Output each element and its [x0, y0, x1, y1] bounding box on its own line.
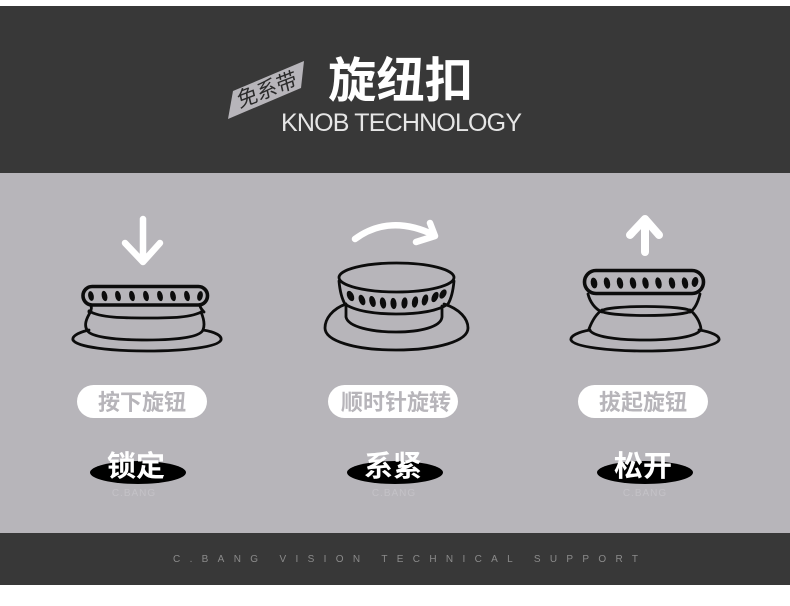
watermark: C.BANG — [623, 488, 667, 499]
illustration: knob rotated — [325, 263, 468, 350]
badge: no strap needed: 免系带 — [235, 67, 299, 113]
pill label: press knob — [77, 385, 207, 418]
illustration: knob pulled up — [571, 270, 719, 351]
subtitle: KNOB TECHNOLOGY — [281, 109, 522, 137]
step 2: rotate clockwise — [325, 223, 468, 499]
footer text: C.BANG VISION TECHNICAL SUPPORT — [173, 554, 638, 565]
pill label: pull knob: 拔起旋钮 — [599, 390, 687, 415]
step 3: pull up — [571, 219, 719, 499]
result badge: locked — [90, 450, 186, 484]
step 1: press down — [73, 219, 221, 499]
icon: up arrow — [630, 219, 659, 252]
panel: header band — [0, 6, 790, 173]
panel: footer band — [0, 533, 790, 585]
title: 旋纽扣 — [328, 55, 473, 108]
result badge: locked: 锁定 — [107, 450, 165, 483]
icon: down arrow — [125, 219, 160, 262]
panel: main grey area — [0, 173, 790, 533]
watermark: C.BANG — [372, 488, 416, 499]
pill label: pull knob — [578, 385, 708, 418]
pill label: rotate clockwise: 顺时针旋转 — [341, 390, 451, 415]
pill label: rotate clockwise — [328, 385, 458, 418]
illustration: knob pressed down — [73, 286, 221, 351]
result badge: fastened: 系紧 — [364, 450, 422, 483]
result badge: released — [597, 450, 693, 484]
watermark: C.BANG — [112, 488, 156, 499]
icon: curved arrow — [355, 223, 435, 242]
result badge: released: 松开 — [614, 450, 672, 483]
badge: no strap needed — [228, 61, 304, 119]
pill label: press knob: 按下旋钮 — [98, 390, 186, 415]
result badge: fastened — [347, 450, 443, 484]
